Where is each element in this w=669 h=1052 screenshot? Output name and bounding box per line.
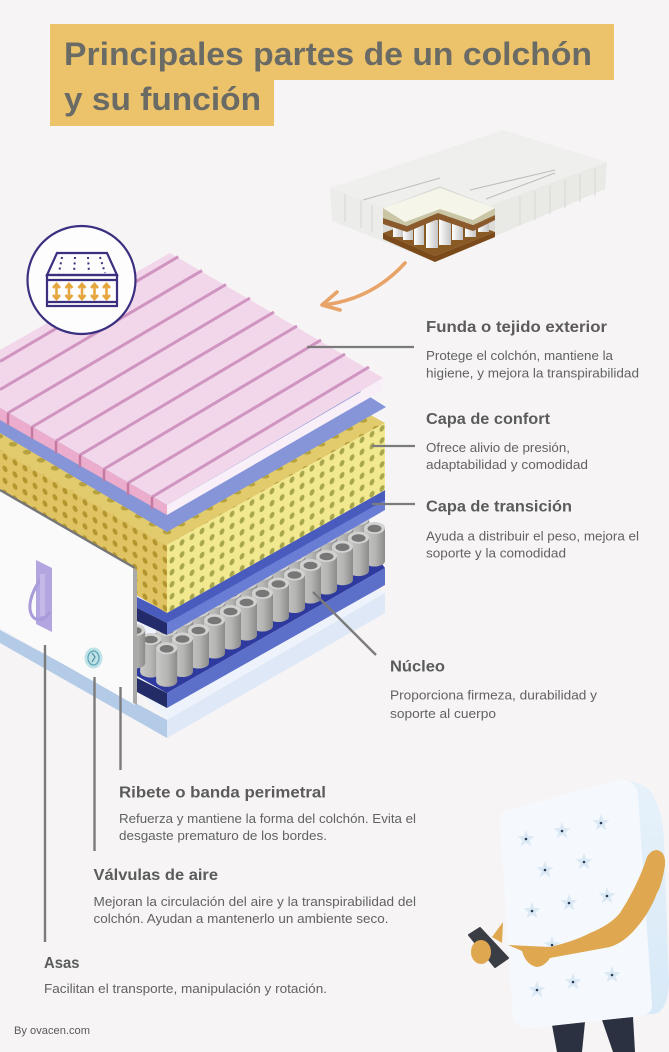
text: confort [426,411,588,472]
text: valvulas: colchón. Ayudan a mantenerlo un ambiente seco. [94,912,388,926]
mattress body [500,780,669,1028]
text: confort: adaptabilidad y comodidad [426,458,588,472]
small mattress illustration [330,130,607,262]
text: asas [44,955,327,996]
bottom support layer [137,555,385,708]
text: nucleo: soporte al cuerpo [390,707,496,721]
phone hand [469,922,508,967]
leader line: ribete [119,687,122,770]
text: valvulas: Mejoran la circulación del aire y la transpirabilidad del [94,895,416,909]
text: transicion: Capa de transición [426,498,572,516]
text: confort: Ofrece alivio de presión, [426,441,570,455]
text: ribete: Ribete o banda perimetral [119,784,326,802]
text: nucleo: Proporciona firmeza, durabilidad y [390,688,598,702]
pink cover layer [0,253,383,515]
text: transicion: soporte y la comodidad [426,546,566,560]
text: ribete: Refuerza y mantiene la forma del colchón. Evita el [119,812,416,826]
layered mattress diagram [0,253,386,738]
icon: handle [30,560,52,632]
leader line: transicion [372,503,415,505]
arm [508,850,665,967]
text: funda: Funda o tejido exterior [426,319,607,336]
text: valvulas [94,867,416,926]
leader line: valvulas [93,677,96,851]
leader line: asas [44,645,46,942]
title: y su función [64,81,261,117]
credit: By ovacen.com [14,1025,90,1037]
mascot: walking mattress with phone [469,780,669,1052]
text: ribete [119,784,416,843]
text: ribete: desgaste prematuro de los bordes. [119,829,327,843]
mattress tufts [518,814,620,997]
title: Principales partes de un colchón [64,36,592,72]
base layer [0,585,385,738]
perimeter panel with handle and valve [0,490,137,705]
icon: circle mattress badge [28,226,136,334]
transition layer [137,490,385,635]
text: funda: higiene, y mejora la transpirabilidad [426,366,639,380]
text: asas: Facilitan el transporte, manipulación y rotación. [44,982,327,996]
leader line: confort [372,445,415,447]
leader line: nucleo [313,592,376,655]
blue thin layer [0,300,386,532]
text: transicion: Ayuda a distribuir el peso, mejora el [426,530,639,544]
text: transicion [426,498,639,560]
spring core [124,513,385,687]
title [50,24,614,126]
arrow: orange curved [322,263,405,310]
text: confort: Capa de confort [426,411,551,428]
legs [552,1017,635,1052]
text: funda: Protege el colchón, mantiene la [426,349,613,363]
icon: air valve [84,648,102,668]
text: nucleo: Núcleo [390,658,445,676]
text: asas: Asas [44,955,80,972]
text: nucleo [390,658,598,721]
text: valvulas: Válvulas de aire [94,867,218,884]
leader line: funda [307,346,414,348]
text: funda [426,319,639,380]
comfort layer [0,320,385,613]
